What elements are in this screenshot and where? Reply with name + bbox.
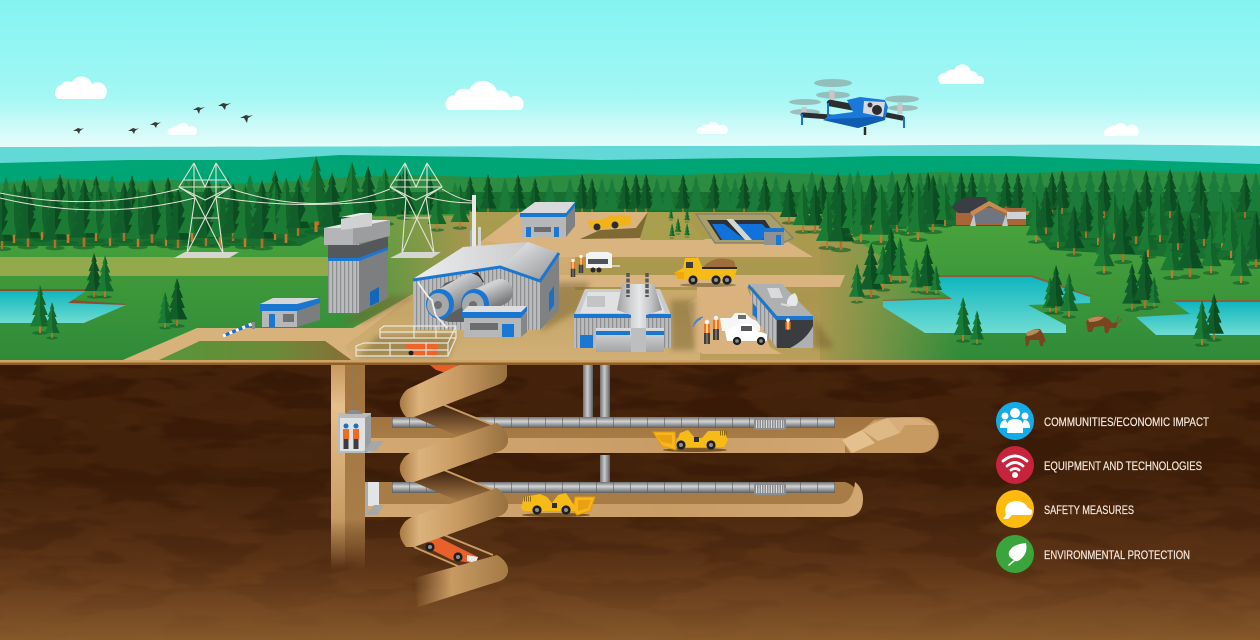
door interior [432, 273, 505, 322]
soil heap shadow [580, 212, 648, 239]
exhaust stacks [470, 195, 481, 247]
pickup rear [720, 313, 760, 331]
service building with dish [748, 284, 813, 348]
legend: communities [996, 402, 1209, 440]
arms [803, 115, 902, 118]
cloud 1 [55, 76, 107, 99]
front forest: left [0, 156, 469, 251]
underground loader lower [521, 493, 595, 517]
legs [802, 103, 904, 128]
clouds [55, 64, 1139, 136]
back building [520, 202, 575, 237]
main hangar [413, 242, 559, 330]
service pad [687, 287, 782, 354]
legend: environment: ENVIRONMENTAL PROTECTION [1044, 550, 1190, 562]
lower tunnel [365, 482, 863, 517]
ventilation pipes [392, 365, 835, 495]
underground loader upper [653, 430, 728, 452]
legend: equipment: EQUIPMENT AND TECHNOLOGIES [1044, 461, 1202, 473]
front forest: right [780, 174, 1260, 285]
water treatment basin [696, 214, 793, 245]
roads [118, 212, 845, 362]
cloud 4 [168, 123, 197, 135]
legend: equipment [996, 446, 1202, 484]
centre pond [883, 275, 1091, 333]
stacks [628, 273, 647, 297]
rotor blurs [789, 79, 919, 115]
cloud 6 [1104, 123, 1139, 136]
rock pile [842, 417, 938, 453]
distant green ridge [0, 155, 1260, 210]
vertical risers [583, 365, 593, 419]
ramp band 3 [400, 488, 508, 547]
yellow loader surface [587, 215, 632, 230]
orange scoop vehicle [425, 537, 478, 563]
legend: safety: SAFETY MEASURES [1044, 505, 1134, 517]
ramp interiors [414, 405, 493, 437]
mine shaft [331, 365, 365, 570]
workers, wifi, white pickups [693, 313, 767, 345]
workers and trailer [571, 252, 620, 277]
body [823, 97, 888, 128]
central hood [617, 284, 662, 331]
gatehouse [260, 297, 320, 327]
decline ramp [400, 365, 508, 607]
safety platforms with vehicle [356, 326, 456, 356]
top vehicle [430, 365, 458, 374]
lower shaft door [365, 482, 384, 515]
door curve [418, 282, 447, 328]
embankment [640, 212, 705, 240]
legend: safety [996, 490, 1134, 528]
legend [996, 402, 1209, 573]
legend: environment [996, 535, 1190, 573]
lodge [951, 197, 1030, 226]
mid road [560, 275, 845, 287]
isolated trees [30, 208, 1224, 347]
cloud 5 [697, 122, 728, 134]
transmission tower left [174, 163, 239, 258]
dump truck [674, 257, 737, 287]
ramp band 4 [414, 555, 508, 607]
cloud 2 [446, 81, 524, 110]
birds [73, 103, 253, 134]
cloud 3 [938, 64, 984, 84]
ramp band 2 [400, 423, 508, 482]
grass band olive strip [0, 257, 340, 276]
fan units [754, 418, 786, 430]
surface edge [0, 360, 1260, 366]
motors [830, 90, 834, 103]
transmission tower right [390, 163, 442, 258]
boom barrier [223, 322, 255, 336]
processing tower [324, 213, 390, 313]
ramp band 1 [400, 365, 507, 417]
hangar office [462, 306, 527, 337]
pickup front [725, 324, 767, 341]
left pond [0, 289, 126, 323]
rollers [442, 287, 470, 303]
dirt area [340, 212, 960, 362]
forest backdrop [0, 170, 1260, 260]
ground: grass [0, 212, 1260, 365]
compressor building [574, 273, 671, 352]
sky background [0, 0, 1260, 150]
right pond [1136, 300, 1260, 335]
legend: communities: COMMUNITIES/ECONOMIC IMPACT [1044, 417, 1209, 429]
access road [118, 290, 480, 362]
upper tunnel [365, 417, 939, 453]
upper pad [483, 212, 813, 257]
roadside triangle [155, 341, 354, 362]
camera [863, 101, 885, 117]
hangar pad [345, 240, 700, 362]
power lines [0, 189, 472, 210]
upper duct [392, 417, 835, 428]
elk [1025, 316, 1122, 346]
lower duct [392, 482, 835, 493]
hoist cable [353, 365, 356, 412]
building shadows [340, 282, 835, 358]
underground soil [0, 365, 1260, 640]
back tree row [0, 168, 1260, 230]
far hills [0, 145, 1260, 175]
drone [789, 79, 919, 135]
elevator cage with workers [338, 410, 384, 453]
